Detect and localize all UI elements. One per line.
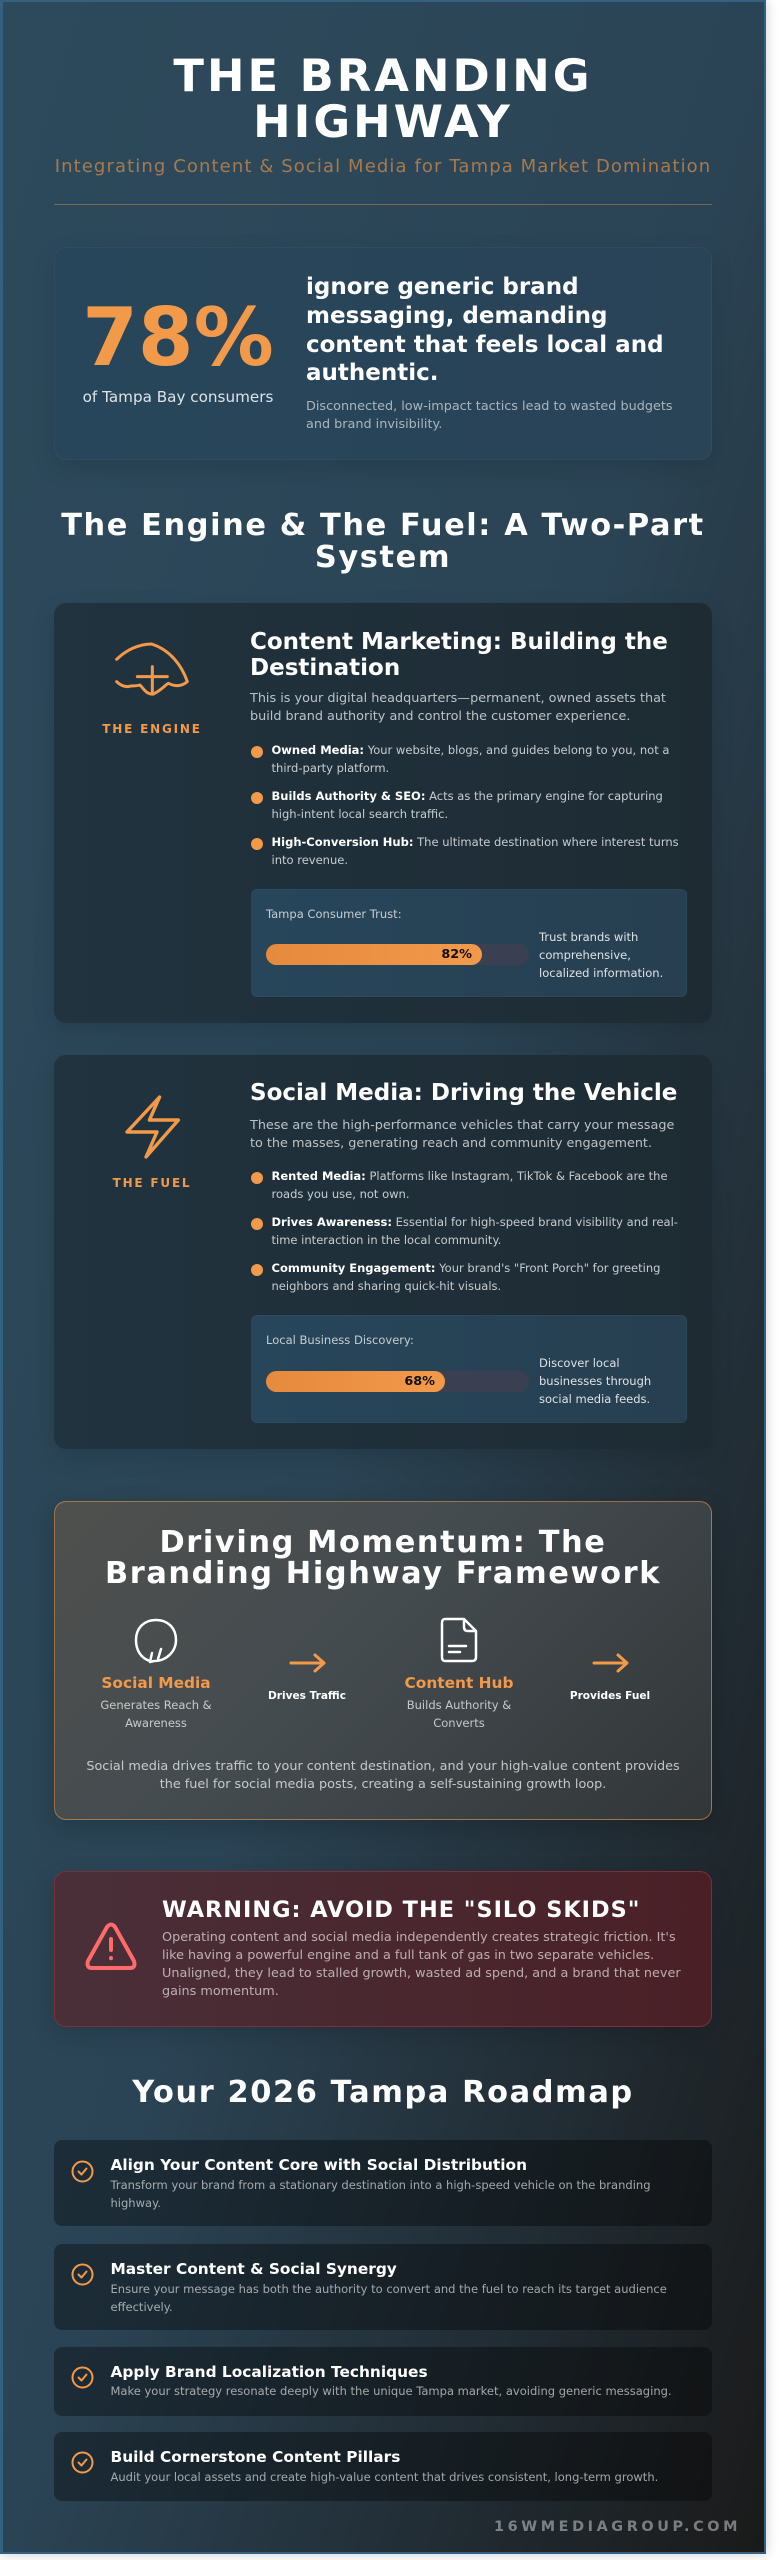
footer brand: 16WMEDIAGROUP.COM <box>494 2519 741 2535</box>
stat explanation: comprehensive, <box>539 948 631 962</box>
panel: warning <box>54 1871 712 2027</box>
card heading: content marketing: Content Marketing: Building the <box>250 629 668 655</box>
progress bar 82% <box>266 944 529 965</box>
card heading: content marketing: Destination <box>250 655 400 681</box>
node caption <box>407 1698 511 1730</box>
bullet: rented media: Rented Media: Platforms like Instagram, TikTok & Facebook are the <box>272 1169 668 1183</box>
node caption: Builds Authority & <box>407 1698 511 1712</box>
panel: 78% stat <box>54 247 712 460</box>
panel: social media card <box>54 1055 712 1449</box>
node caption <box>100 1698 212 1730</box>
framework heading: Driving Momentum: The <box>159 1525 606 1560</box>
item 1 text <box>110 2178 651 2210</box>
stat headline: content that feels local and <box>306 332 664 358</box>
stat headline: authentic. <box>306 360 438 386</box>
icon: check 1 <box>72 2160 94 2182</box>
stat box: local discovery <box>250 1315 686 1423</box>
stat caption: of Tampa Bay consumers <box>83 388 273 406</box>
item 1 text: highway. <box>110 2196 161 2210</box>
bullet marker 3 <box>251 838 263 850</box>
bullet: drives awareness: time interaction in the local community. <box>272 1233 501 1247</box>
bullet: builds authority: high-intent local search traffic. <box>272 807 448 821</box>
stat headline <box>306 274 664 386</box>
bullet: owned media <box>272 743 669 775</box>
node: social media: Social Media <box>101 1674 211 1692</box>
bullet: rented media: roads you use, not own. <box>272 1187 410 1201</box>
item 2 title: Master Content & Social Synergy <box>110 2260 397 2278</box>
roadmap heading: Your 2026 Tampa Roadmap <box>132 2075 634 2110</box>
stat note <box>306 399 673 432</box>
item 2 text: Ensure your message has both the authority to convert and the fuel to reach its target audience <box>110 2282 667 2296</box>
item 4 title: Build Cornerstone Content Pillars <box>110 2448 400 2466</box>
warning text <box>162 1930 681 1999</box>
bullet: community engagement <box>272 1261 660 1293</box>
panel: content marketing card <box>54 603 712 1023</box>
warning text: like having a powerful engine and a full tank of gas in two separate vehicles. <box>162 1948 654 1963</box>
flow label: drives traffic: Drives Traffic <box>268 1690 346 1702</box>
arrow 2 <box>592 1653 629 1673</box>
node caption: Awareness <box>125 1716 187 1730</box>
title: HIGHWAY <box>253 95 513 148</box>
bullet: high conversion <box>272 835 679 867</box>
node caption: Converts <box>433 1716 485 1730</box>
section heading: engine and fuel <box>61 508 705 575</box>
bullet marker 2 <box>251 792 263 804</box>
warning text: Operating content and social media independently creates strategic friction. It's <box>162 1930 676 1945</box>
framework heading <box>105 1525 661 1590</box>
icon: engine <box>115 642 189 696</box>
stat explanation <box>539 1356 651 1406</box>
node caption: Generates Reach & <box>100 1698 212 1712</box>
bullet marker 3 <box>251 1264 263 1276</box>
arrow 1 <box>290 1653 326 1673</box>
bullet: rented media <box>272 1169 668 1201</box>
bullet: builds authority <box>272 789 663 821</box>
bullet marker 1 <box>251 746 263 758</box>
stat box: consumer trust <box>250 889 686 997</box>
bullet: high conversion: High-Conversion Hub: The ultimate destination where interest turns <box>272 835 679 849</box>
roadmap item 1 <box>54 2140 712 2226</box>
bullet: drives awareness: Drives Awareness: Essential for high-speed brand visibility and real- <box>272 1215 678 1229</box>
fuel label: THE FUEL <box>113 1176 191 1190</box>
bullet: high conversion: into revenue. <box>272 853 348 867</box>
item 3 text: Make your strategy resonate deeply with the unique Tampa market, avoiding generic messaging. <box>110 2384 672 2398</box>
big number 78%: 78% <box>82 291 274 384</box>
icon: check 4 <box>72 2452 94 2474</box>
icon: lightning fuel <box>125 1095 180 1159</box>
roadmap item 4 <box>54 2432 712 2501</box>
roadmap item 2 <box>54 2244 712 2330</box>
progress bar 68%: 68% <box>404 1374 435 1389</box>
framework summary: Social media drives traffic to your content destination, and your high-value content provides <box>86 1759 680 1774</box>
item 4 text: Audit your local assets and create high-value content that drives consistent, long-term growth. <box>110 2470 658 2484</box>
icon: document <box>440 1618 478 1662</box>
section heading: engine and fuel: The Engine & The Fuel: A Two-Part <box>61 508 705 543</box>
framework heading: Branding Highway Framework <box>105 1556 661 1590</box>
card heading: content marketing <box>250 629 668 681</box>
card description <box>250 691 666 724</box>
item 1 title: Align Your Content Core with Social Distribution <box>110 2156 527 2174</box>
bullet: owned media: third-party platform. <box>272 761 389 775</box>
bullet: drives awareness <box>272 1215 678 1247</box>
warning heading: WARNING: AVOID THE "SILO SKIDS" <box>162 1897 640 1923</box>
stat note: Disconnected, low-impact tactics lead to wasted budgets <box>306 399 673 414</box>
stat headline: ignore generic brand <box>306 274 579 300</box>
stat headline: messaging, demanding <box>306 303 608 329</box>
stat explanation <box>538 930 663 980</box>
framework summary: the fuel for social media posts, creating a self-sustaining growth loop. <box>160 1777 606 1792</box>
title: THE BRANDING <box>173 49 593 102</box>
stat explanation: businesses through <box>539 1374 651 1388</box>
icon: check 2 <box>72 2264 94 2286</box>
item 2 text <box>110 2282 667 2314</box>
framework summary <box>86 1759 680 1792</box>
card heading: social media: Social Media: Driving the Vehicle <box>250 1080 677 1106</box>
card description: to the masses, generating reach and community engagement. <box>250 1136 652 1151</box>
roadmap item 3 <box>54 2347 712 2416</box>
bullet: community engagement: Community Engagement: Your brand's "Front Porch" for greeting <box>272 1261 660 1275</box>
bullet: builds authority: Builds Authority & SEO: Acts as the primary engine for capturing <box>272 789 663 803</box>
icon: chat bubble <box>134 1618 178 1664</box>
stat explanation: social media feeds. <box>539 1392 650 1406</box>
title <box>173 49 593 148</box>
stat label: Tampa Consumer Trust: <box>266 907 402 921</box>
card description: build brand authority and control the customer experience. <box>250 709 630 724</box>
card description: This is your digital headquarters—permanent, owned assets that <box>250 691 666 706</box>
bullet: owned media: Owned Media: Your website, blogs, and guides belong to you, not a <box>272 743 669 757</box>
item 2 text: effectively. <box>110 2300 173 2314</box>
progress bar 82%: 82% <box>441 947 472 962</box>
node: content hub: Content Hub <box>405 1674 513 1692</box>
progress bar 68% <box>266 1371 529 1392</box>
flow label: provides fuel: Provides Fuel <box>570 1690 650 1702</box>
stat explanation: localized information. <box>539 966 663 980</box>
item 3 title: Apply Brand Localization Techniques <box>110 2363 428 2381</box>
bullet marker 1 <box>251 1172 263 1184</box>
bullet marker 2 <box>251 1218 263 1230</box>
bullet: community engagement: neighbors and sharing quick-hit visuals. <box>272 1279 501 1293</box>
stat note: and brand invisibility. <box>306 417 442 432</box>
section heading: engine and fuel: System <box>315 540 451 575</box>
panel: framework <box>54 1501 712 1820</box>
warning text: Unaligned, they lead to stalled growth, wasted ad spend, and a brand that never <box>162 1966 681 1981</box>
item 1 text: Transform your brand from a stationary destination into a high-speed vehicle on the branding <box>110 2178 651 2192</box>
stat label: Local Business Discovery: <box>266 1333 414 1347</box>
stat explanation: Discover local <box>539 1356 620 1370</box>
icon: warning triangle <box>86 1922 136 1970</box>
icon: check 3 <box>72 2366 94 2388</box>
warning text: gains momentum. <box>162 1984 279 1999</box>
card description <box>250 1118 674 1151</box>
card description: These are the high-performance vehicles that carry your message <box>250 1118 674 1133</box>
engine label: THE ENGINE <box>102 722 202 736</box>
stat explanation: Trust brands with <box>539 930 638 944</box>
subtitle: Integrating Content & Social Media for Tampa Market Domination <box>55 156 711 177</box>
